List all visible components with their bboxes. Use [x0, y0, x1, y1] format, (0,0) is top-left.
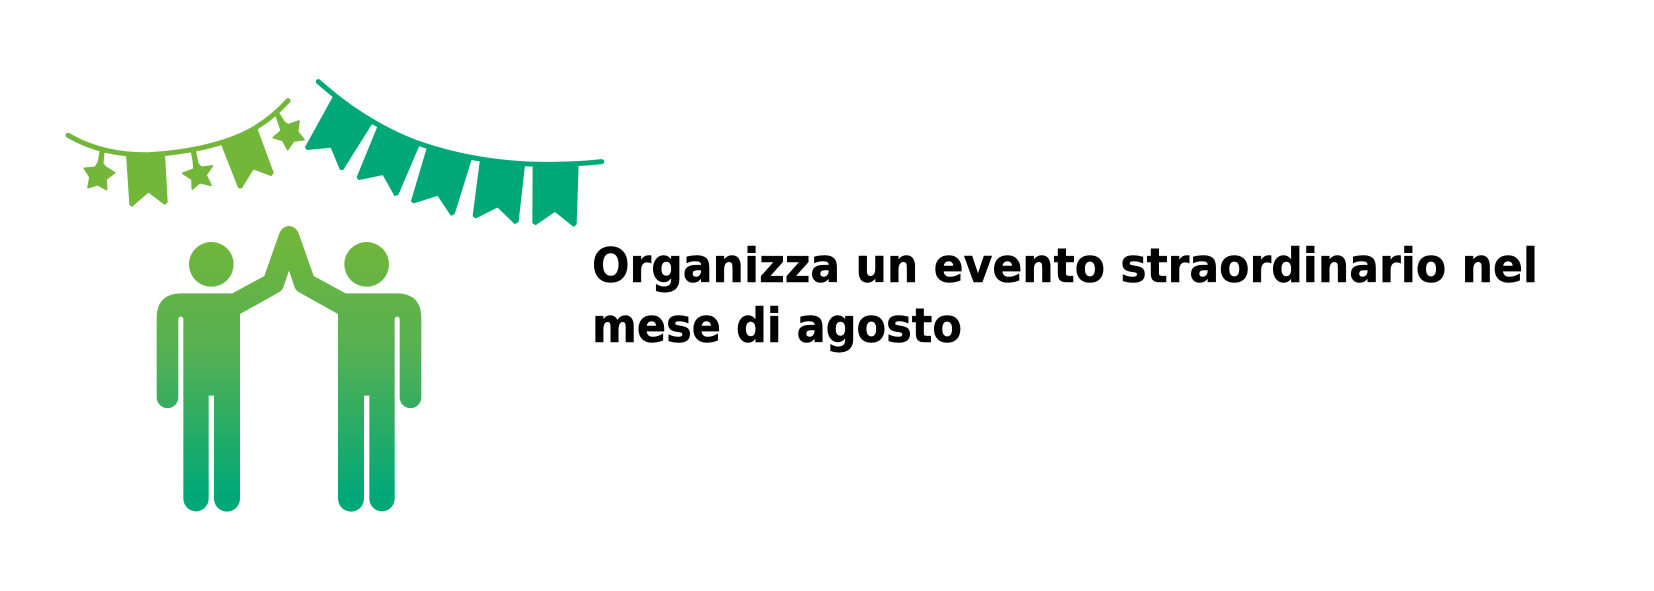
heading	[592, 239, 1538, 354]
heading line 2: mese di agosto	[592, 299, 962, 354]
star 3	[273, 113, 304, 150]
right head	[344, 242, 389, 287]
flag 5	[533, 165, 578, 226]
flag 1	[127, 154, 167, 206]
left figure	[157, 226, 289, 512]
left head	[189, 242, 234, 287]
star 2	[183, 152, 212, 189]
flag 2	[358, 124, 419, 195]
garland string	[318, 82, 602, 164]
left light-green bunting	[68, 101, 304, 206]
garland string	[68, 101, 288, 155]
flag 1	[306, 96, 371, 169]
right dark-green bunting	[306, 82, 602, 226]
star 1	[84, 152, 115, 190]
flag 3	[412, 146, 471, 215]
right figure	[289, 226, 421, 512]
heading line 1: Organizza un evento straordinario nel	[592, 239, 1538, 294]
flag 2	[222, 129, 273, 187]
high-five figures icon	[157, 226, 421, 512]
flag 4	[474, 159, 524, 223]
